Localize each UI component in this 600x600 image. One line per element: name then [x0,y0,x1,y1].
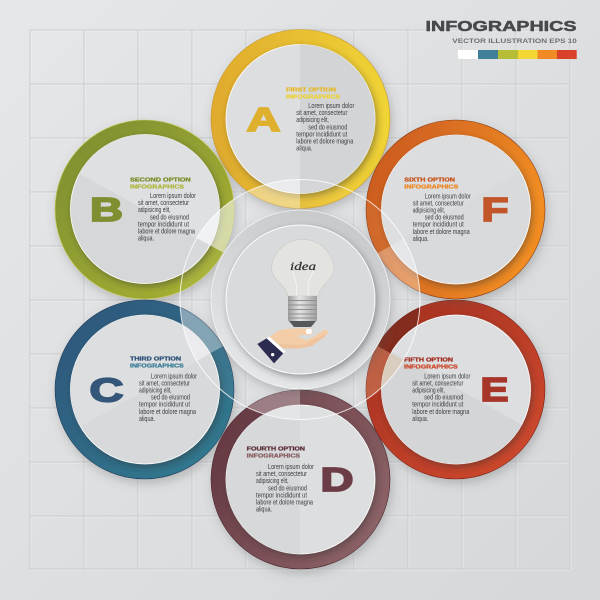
heading D: FOURTH OPTION [247,447,305,453]
icon: hand [257,328,328,363]
body D: labore et dolore magna [256,498,313,506]
panel: D fourth option: INFOGRAPHICS [247,454,300,460]
body A: aliqua. [296,145,312,153]
body B: Lorem ipsum dolor [150,192,196,200]
body D: tempor incididunt ut [256,491,307,499]
glass overlap C [180,308,223,360]
body D: adipisicing elit, [256,477,289,485]
disc A [226,44,376,194]
body F: tempor incididunt ut [413,221,464,229]
letter A: A [246,101,280,138]
heading A: FIRST OPTION [286,87,336,93]
body C: sit amet, consectetur [139,379,190,387]
glass ring outline [180,180,420,420]
body B: sed do eiusmod [150,213,189,221]
body D: aliqua. [256,506,272,514]
ring D [211,390,390,569]
body E: Lorem ipsum dolor [424,372,471,380]
disc E [379,314,537,472]
body C: labore et dolore magna [139,408,196,416]
body C: aliqua. [139,415,155,423]
body F: aliqua. [413,235,429,243]
panel: F sixth option [364,120,552,306]
body C: tempor incididunt ut [139,401,190,409]
panel: F sixth option: INFOGRAPHICS [404,184,459,190]
colour bar [458,50,577,59]
body B: tempor incididunt ut [138,220,189,228]
title: INFOGRAPHICS [426,19,577,35]
panel: A first option: INFOGRAPHICS [286,95,340,101]
body D [256,463,314,514]
subtitle: VECTOR ILLUSTRATION EPS 10 [452,39,578,45]
body F: sit amet, consectetur [413,199,464,207]
ring A [211,30,390,208]
body D: sit amet, consectetur [256,470,307,478]
centre outer ring [211,210,390,389]
disc F [360,130,540,284]
panel: B second option: INFOGRAPHICS [130,185,184,191]
body A: sit amet, consectetur [296,109,348,117]
body E: aliqua. [412,415,428,423]
glass overlap A [248,180,300,208]
icon: light bulb [272,239,334,327]
glass overlap F [378,239,420,292]
body C: sed do eiusmod [151,394,190,402]
header title [426,19,578,59]
letter F: F [482,191,508,228]
glass overlap B [198,200,234,252]
ring C [55,300,234,479]
disc C [69,314,226,471]
panel: A first option [208,29,396,213]
body B: aliqua. [138,235,154,243]
body A: tempor incididunt ut [296,130,347,138]
glass overlap E [366,346,403,399]
body F: labore et dolore magna [413,228,470,236]
body C: Lorem ipsum dolor [151,372,197,380]
body F: adipisicing elit, [413,207,445,215]
panel: centre idea [211,210,390,389]
letter B: B [90,191,123,228]
body B [138,192,196,243]
panel: C third option: INFOGRAPHICS [130,364,184,370]
body F: Lorem ipsum dolor [425,192,471,200]
body E: adipisicing elit, [412,386,445,394]
panel: C third option [52,300,240,488]
panel: B second option [52,120,240,304]
body E: labore et dolore magna [412,408,469,416]
body A: labore et dolore magna [296,138,353,146]
body A: Lorem ipsum dolor [308,102,355,110]
heading F: SIXTH OPTION [404,177,455,183]
heading C: THIRD OPTION [130,357,181,363]
idea label: idea [290,259,316,273]
body A: adipisicing elit, [296,116,329,124]
body F: sed do eiusmod [425,214,464,222]
glass overlap D [248,390,300,419]
dark wedge E [378,308,420,353]
body B: sit amet, consectetur [138,199,189,207]
body B: labore et dolore magna [138,228,195,236]
letter C: C [90,371,124,408]
disc D [225,404,375,554]
heading B: SECOND OPTION [130,178,191,184]
ring E [366,300,545,479]
letter E: E [480,371,508,408]
body A: sed do eiusmod [308,123,347,131]
ring B [55,120,234,299]
body E [412,372,471,423]
panel: D fourth option [208,390,396,578]
body E: sed do eiusmod [424,394,463,402]
body B: adipisicing elit, [138,206,171,214]
panel: E fifth option [364,300,552,488]
heading E: FIFTH OPTION [404,357,453,363]
body E: tempor incididunt ut [412,401,463,409]
body A [296,102,355,153]
body F [413,192,471,243]
ring F [366,120,545,299]
centre disc [226,225,375,374]
body C: adipisicing elit, [139,386,172,394]
body D: sed do eiusmod [268,484,307,492]
disc B [68,134,226,290]
panel: E fifth option: INFOGRAPHICS [404,364,458,370]
body E: sit amet, consectetur [412,379,464,387]
body C [139,372,197,423]
body D: Lorem ipsum dolor [268,463,314,471]
letter D: D [320,461,354,498]
